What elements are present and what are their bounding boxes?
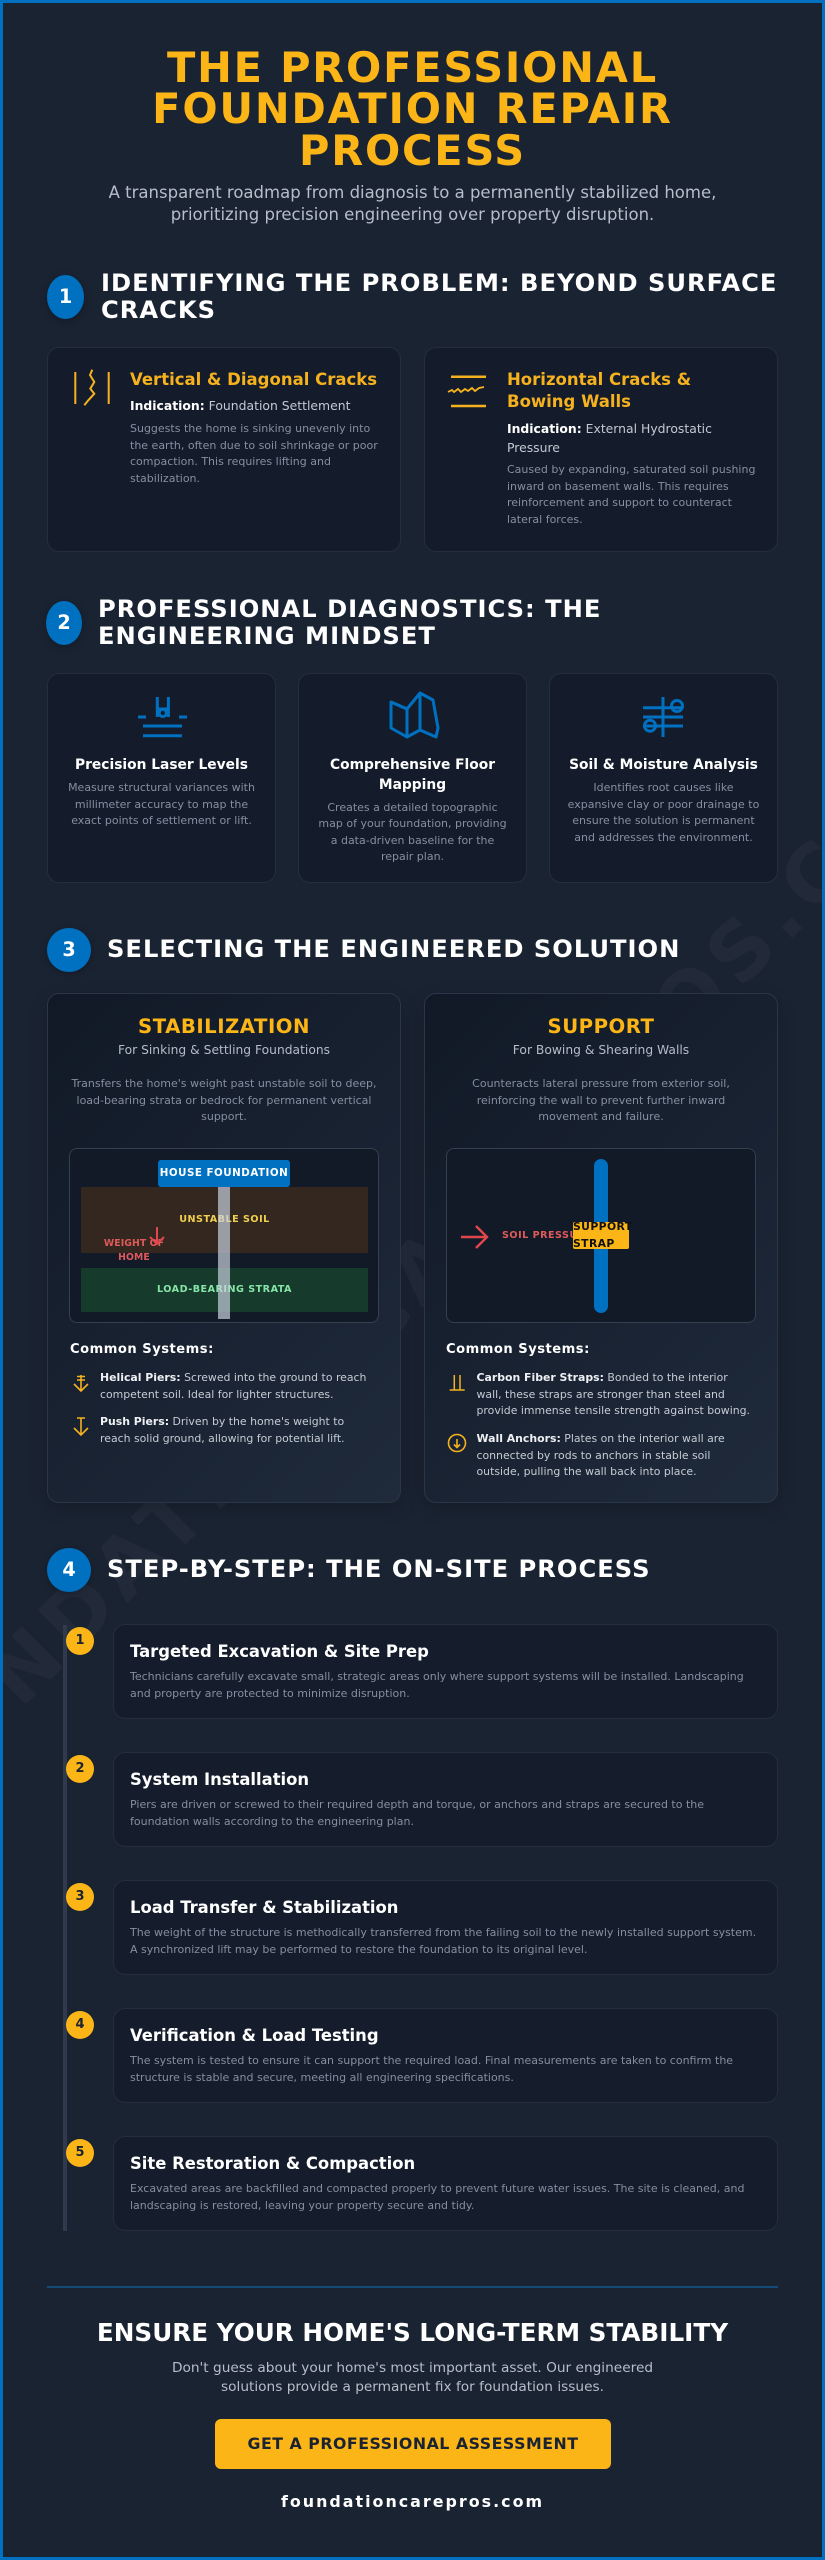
panel: stabilization <box>47 993 401 1503</box>
item text: connected by rods to anchors in stable soil <box>476 1448 710 1462</box>
item text <box>476 1432 725 1478</box>
step 4 card <box>113 2008 778 2103</box>
call to action button <box>215 2419 611 2469</box>
item text: outside, pulling the wall back into place. <box>476 1465 697 1478</box>
icon: soil sliders <box>643 697 684 737</box>
description: reinforcement and support to counteract <box>507 496 732 509</box>
description: repair plan. <box>381 850 444 863</box>
description <box>507 463 755 526</box>
description <box>68 781 255 827</box>
step 4 badge: 4 <box>75 2017 85 2032</box>
load-bearing strata layer: LOAD-BEARING STRATA <box>157 1284 292 1295</box>
support strap label: STRAP <box>573 1236 615 1250</box>
card heading <box>330 757 496 792</box>
diagram: wall with support strap <box>446 1148 756 1323</box>
heading text: SELECTING THE ENGINEERED SOLUTION <box>107 935 680 963</box>
description <box>130 422 378 484</box>
description: Caused by expanding, saturated soil pushing <box>507 463 755 476</box>
step 3 badge <box>66 1883 94 1911</box>
card heading: Bowing Walls <box>507 392 631 411</box>
weight of home label: HOME <box>118 1252 150 1263</box>
section 4 heading <box>47 1548 650 1593</box>
house foundation <box>158 1160 290 1187</box>
step title: Load Transfer & Stabilization <box>130 1898 398 1917</box>
badge 1: 1 <box>59 285 72 308</box>
description: load-bearing strata or bedrock for permanent vertical <box>77 1094 371 1106</box>
item text: competent soil. Ideal for lighter structures. <box>100 1388 334 1400</box>
heading text: PROFESSIONAL DIAGNOSTICS: THE <box>98 595 601 623</box>
step description: Excavated areas are backfilled and compacted properly to prevent future water issues. The site is cleaned, and <box>130 2182 744 2195</box>
step 1 card <box>113 1624 778 1719</box>
common systems heading: Common Systems: <box>70 1342 214 1357</box>
step description: foundation walls according to the engineering plan. <box>130 1814 414 1828</box>
badge 4: 4 <box>62 1558 76 1581</box>
step title: Targeted Excavation & Site Prep <box>130 1642 429 1661</box>
step 3 badge: 3 <box>75 1889 85 1904</box>
wall <box>594 1159 608 1313</box>
card heading: Soil & Moisture Analysis <box>569 757 758 773</box>
icon: horizontal crack <box>448 376 486 408</box>
badge 3: 3 <box>62 938 76 961</box>
description: Creates a detailed topographic <box>327 800 498 814</box>
description: Measure structural variances with <box>68 781 255 794</box>
load-bearing strata layer <box>81 1268 368 1312</box>
icon: straps <box>450 1375 465 1391</box>
heading text <box>101 269 777 324</box>
step description <box>130 1925 756 1958</box>
website: foundationcarepros.com <box>281 2492 544 2511</box>
indication: Indication: Foundation Settlement <box>130 398 350 413</box>
footer text <box>0 2359 825 2398</box>
support strap label: SUPPORT <box>573 1220 633 1233</box>
description <box>72 1077 376 1123</box>
card heading: Vertical & Diagonal Cracks <box>130 370 377 389</box>
weight of home label: WEIGHT OF <box>104 1238 164 1249</box>
heading text <box>98 595 601 650</box>
step description: and property are protected to minimize disruption. <box>130 1686 410 1700</box>
description: Identifies root causes like <box>593 781 734 794</box>
step 5 badge <box>66 2139 94 2167</box>
subtitle: A transparent roadmap from diagnosis to a permanently stabilized home, <box>109 183 716 202</box>
support strap label <box>573 1222 629 1249</box>
panel heading: SUPPORT <box>548 1015 654 1038</box>
description: Suggests the home is sinking unevenly into <box>130 422 370 435</box>
badge 2: 2 <box>57 611 71 634</box>
arrow: soil pressure <box>461 1225 489 1249</box>
subtitle: prioritizing precision engineering over property disruption. <box>171 204 654 224</box>
description: reinforcing the wall to prevent further inward <box>477 1094 725 1106</box>
item text: Helical Piers: Screwed into the ground to reach <box>100 1371 366 1384</box>
step title: System Installation <box>130 1770 309 1789</box>
heading text: IDENTIFYING THE PROBLEM: BEYOND SURFACE <box>101 269 777 297</box>
panel: soil and moisture analysis <box>549 673 778 883</box>
title: FOUNDATION REPAIR <box>152 84 673 133</box>
step 5 badge: 5 <box>75 2145 85 2160</box>
description: inward on basement walls. This requires <box>507 480 729 492</box>
panel: support <box>424 993 778 1503</box>
panel heading: STABILIZATION <box>138 1015 310 1038</box>
panel: comprehensive floor mapping <box>298 673 527 883</box>
description: support. <box>201 1110 247 1123</box>
item text: Push Piers: Driven by the home's weight to <box>100 1415 344 1428</box>
section 1 heading <box>47 269 777 324</box>
step 1 badge: 1 <box>75 1633 85 1648</box>
card heading <box>507 370 691 411</box>
footer text: Don't guess about your home's most important asset. Our engineered <box>172 2360 653 2376</box>
item text: provide immense tensile strength against bowing. <box>476 1404 750 1417</box>
step description: Technicians carefully excavate small, strategic areas only where support systems will be installed. Landscaping <box>130 1670 744 1683</box>
description: and addresses the environment. <box>574 830 753 844</box>
icon: wall anchor <box>448 1434 466 1452</box>
step description: A synchronized lift may be performed to restore the foundation to its original level. <box>130 1942 587 1956</box>
pier <box>218 1187 230 1319</box>
badge 2 <box>46 601 82 645</box>
description: Transfers the home's weight past unstable soil to deep, <box>72 1077 376 1090</box>
item: helical piers <box>74 1371 366 1400</box>
icon: laser level <box>138 697 187 738</box>
panel subheading: For Bowing & Shearing Walls <box>513 1043 689 1057</box>
description: millimeter accuracy to map the <box>75 798 248 810</box>
item text: Wall Anchors: Plates on the interior wall are <box>476 1432 725 1445</box>
step 5 card <box>113 2136 778 2231</box>
step description <box>130 1670 744 1700</box>
step description: landscaping is restored, leaving your property secure and tidy. <box>130 2198 474 2212</box>
description: compaction. This requires lifting and <box>130 455 331 468</box>
unstable soil layer: UNSTABLE SOIL <box>179 1214 270 1225</box>
card heading: Mapping <box>379 776 446 792</box>
diagram: pier through soil layers <box>69 1148 379 1323</box>
footer heading: ENSURE YOUR HOME'S LONG-TERM STABILITY <box>97 2318 728 2347</box>
step 2 badge <box>66 1755 94 1783</box>
item: carbon fiber straps <box>450 1371 750 1417</box>
step 2 card <box>113 1752 778 1847</box>
panel: precision laser levels <box>47 673 276 883</box>
item: push piers <box>74 1415 345 1444</box>
weight of home label <box>104 1238 164 1263</box>
title <box>152 43 673 175</box>
item: wall anchors <box>448 1432 725 1478</box>
icon: folded map <box>390 692 440 738</box>
step description: Piers are driven or screwed to their required depth and torque, or anchors and straps are secured to the <box>130 1798 704 1811</box>
step description <box>130 2053 733 2086</box>
description <box>318 800 507 863</box>
description: movement and failure. <box>538 1110 664 1123</box>
indication <box>507 421 712 455</box>
unstable soil layer <box>81 1187 368 1253</box>
step 3 card <box>113 1880 778 1975</box>
description: ensure the solution is permanent <box>572 814 755 827</box>
step 1 badge <box>66 1627 94 1655</box>
title: THE PROFESSIONAL <box>167 43 658 92</box>
step 4 badge <box>66 2011 94 2039</box>
item text: wall, these straps are stronger than steel and <box>476 1388 725 1400</box>
section 2 heading <box>46 595 601 650</box>
heading text: CRACKS <box>101 296 216 324</box>
icon: helical anchor <box>74 1375 88 1392</box>
card heading: Horizontal Cracks & <box>507 370 691 389</box>
item text <box>100 1371 366 1400</box>
badge 4 <box>47 1548 91 1592</box>
description: lateral forces. <box>507 512 583 526</box>
description: map of your foundation, providing <box>318 817 507 830</box>
description: the earth, often due to soil shrinkage or poor <box>130 438 378 452</box>
badge 1 <box>47 275 84 319</box>
indication: Pressure <box>507 440 560 455</box>
timeline line <box>63 1625 67 2231</box>
step title: Site Restoration & Compaction <box>130 2154 415 2173</box>
description <box>472 1077 730 1123</box>
arrow: weight <box>149 1227 165 1246</box>
step description: The system is tested to ensure it can support the required load. Final measurements are taken to confirm the <box>130 2054 733 2067</box>
indication: Indication: External Hydrostatic <box>507 421 712 436</box>
card heading: Precision Laser Levels <box>75 757 248 773</box>
description: expansive clay or poor drainage to <box>568 798 759 810</box>
subtitle <box>108 183 716 224</box>
step description: The weight of the structure is methodically transferred from the failing soil to the newly installed support system. <box>130 1926 756 1939</box>
item text <box>100 1415 345 1444</box>
panel: horizontal cracks and bowing walls <box>424 347 778 552</box>
step title: Verification & Load Testing <box>130 2026 379 2045</box>
step description: structure is stable and secure, meeting all engineering specifications. <box>130 2070 514 2084</box>
step description <box>130 2181 744 2214</box>
panel: vertical and diagonal cracks <box>47 347 401 552</box>
soil pressure label: SOIL PRESSURE <box>502 1230 593 1241</box>
panel subheading: For Sinking & Settling Foundations <box>118 1043 330 1057</box>
badge 3 <box>47 928 91 972</box>
item text <box>476 1371 750 1417</box>
description: a data-driven baseline for the <box>331 834 494 846</box>
description <box>568 781 759 844</box>
heading text: STEP-BY-STEP: THE ON-SITE PROCESS <box>107 1555 650 1583</box>
icon: vertical crack <box>74 369 110 406</box>
footer text: solutions provide a permanent fix for foundation issues. <box>221 2379 604 2395</box>
title: PROCESS <box>299 126 526 175</box>
common systems heading: Common Systems: <box>446 1342 590 1357</box>
card heading: Comprehensive Floor <box>330 757 495 773</box>
item text: Carbon Fiber Straps: Bonded to the interior <box>476 1371 728 1384</box>
house foundation: HOUSE FOUNDATION <box>160 1167 288 1179</box>
icon: push pier <box>74 1417 88 1436</box>
description: exact points of settlement or lift. <box>71 814 252 827</box>
description: Counteracts lateral pressure from exterior soil, <box>472 1077 730 1090</box>
step description <box>130 1797 704 1830</box>
step 2 badge: 2 <box>75 1761 85 1776</box>
item text: reach solid ground, allowing for potential lift. <box>100 1432 345 1444</box>
description: stabilization. <box>130 472 200 484</box>
section 3 heading <box>47 928 680 972</box>
call to action button: GET A PROFESSIONAL ASSESSMENT <box>248 2434 578 2453</box>
heading text: ENGINEERING MINDSET <box>98 622 436 650</box>
